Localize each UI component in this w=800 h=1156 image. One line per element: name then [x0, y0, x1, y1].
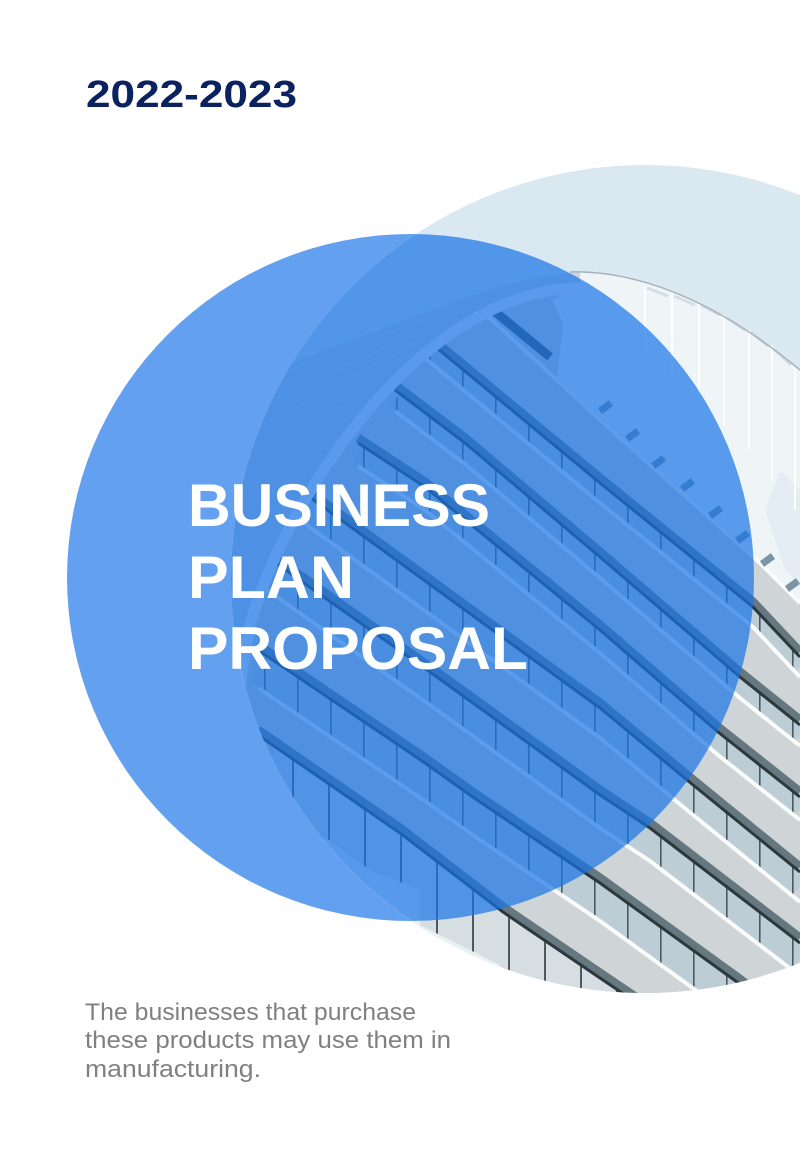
blue circle base	[67, 234, 754, 921]
title	[188, 472, 528, 682]
photo: building in circle	[231, 165, 800, 993]
description text: The businesses that purchase	[85, 999, 416, 1026]
description text: these products may use them in	[85, 1027, 451, 1054]
blue circle overlay on photo	[231, 234, 754, 921]
title: PROPOSAL	[188, 615, 528, 682]
title: PLAN	[188, 544, 354, 611]
description text: manufacturing.	[85, 1056, 261, 1083]
description text	[85, 999, 451, 1083]
year heading: 2022-2023	[86, 74, 297, 116]
title: BUSINESS	[188, 472, 490, 539]
